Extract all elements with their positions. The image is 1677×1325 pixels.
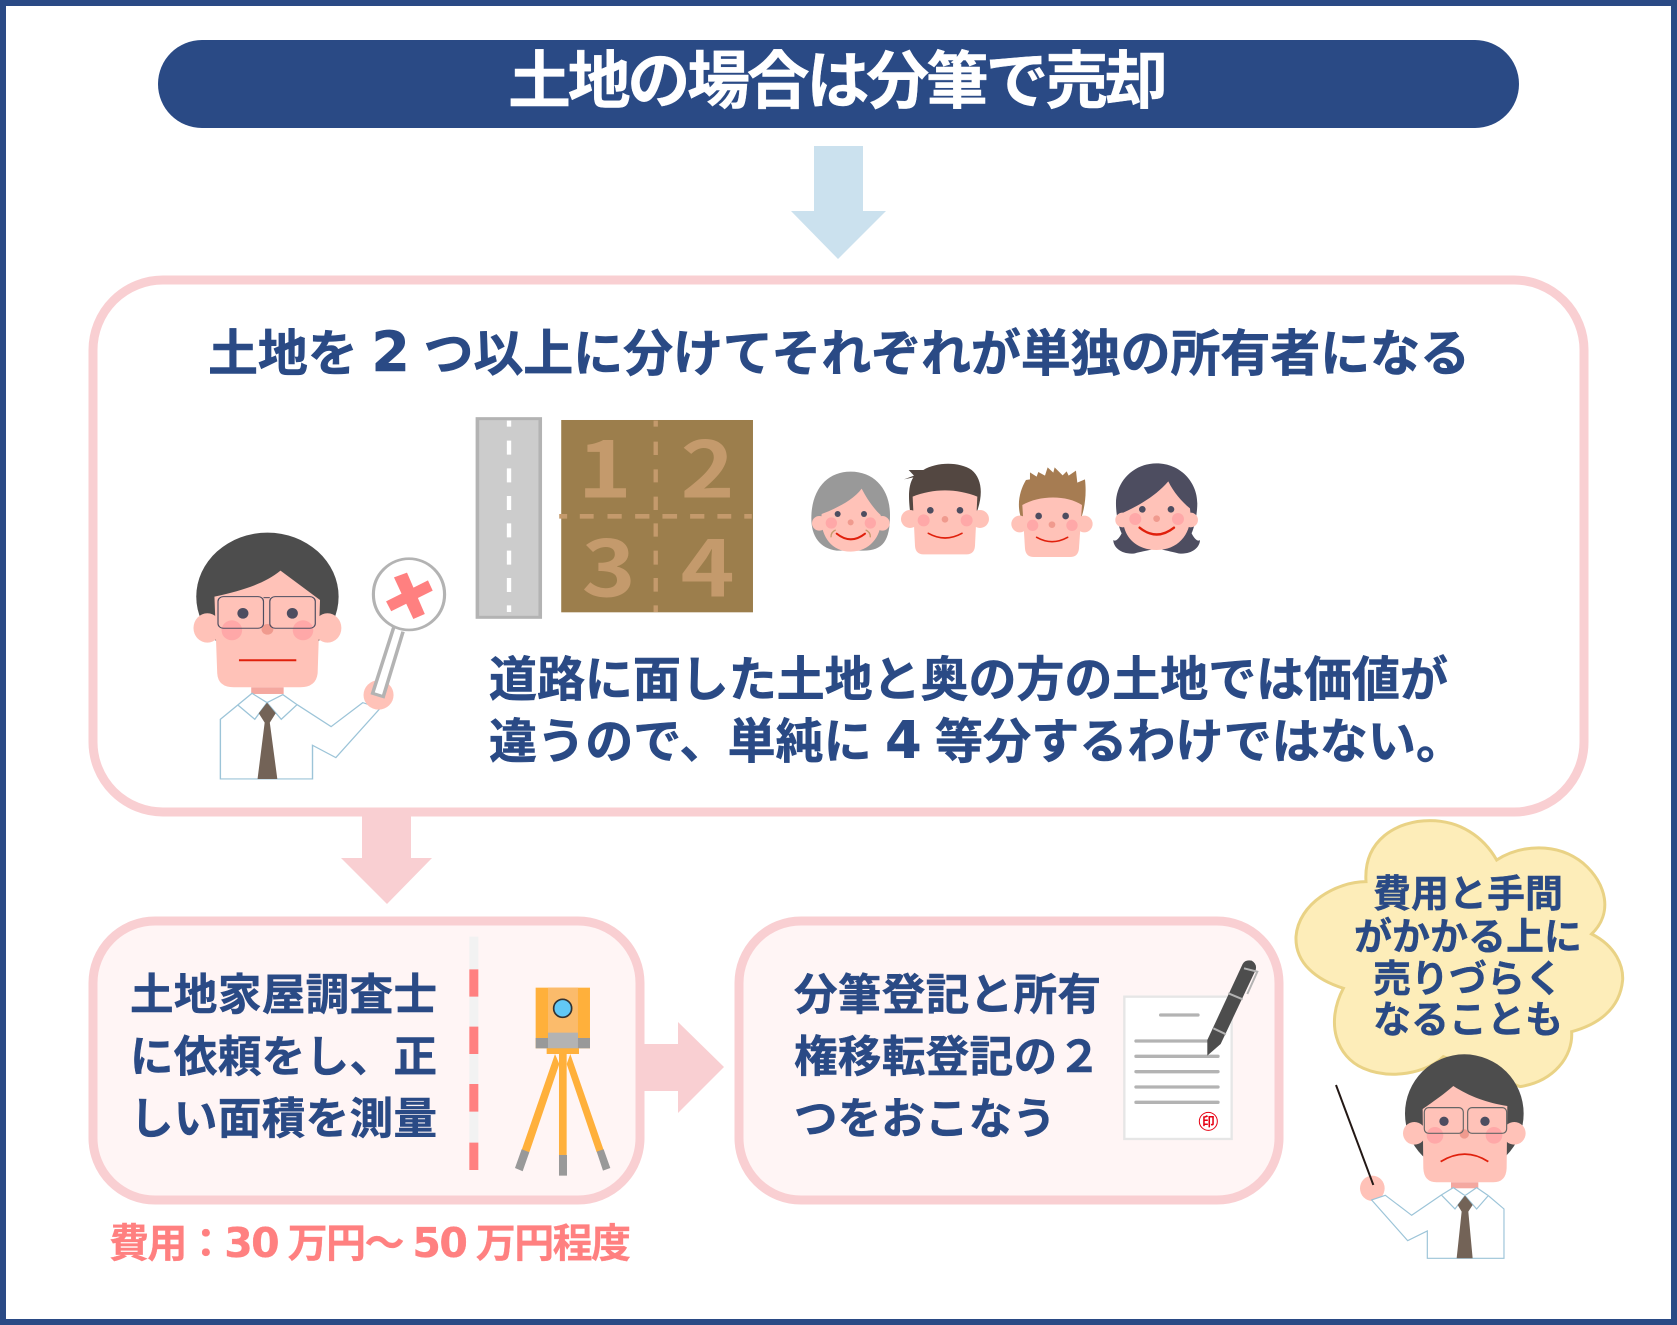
icon: surveying pole and tripod (469, 937, 610, 1176)
registration text: 分筆登記と所有 (794, 972, 1101, 1020)
man with X sign (193, 533, 445, 779)
title (158, 40, 1519, 128)
panel: registration (739, 921, 1279, 1200)
arrow: blue down (791, 146, 886, 259)
explanation text line 1: 道路に面した土地と奥の方の土地では価値が (489, 654, 1448, 707)
face: boy with spiky hair (1011, 467, 1093, 557)
cloud text: なることも (1373, 1000, 1563, 1042)
land divided into four lots: 4 (680, 508, 735, 619)
man with pointer (1336, 1054, 1526, 1258)
land divided into four lots (559, 409, 753, 619)
icon: document and pen: 印 (1202, 1114, 1215, 1129)
face: man with dark hair (901, 464, 989, 554)
registration text: 権移転登記の２ (794, 1034, 1101, 1082)
arrow: pink down (341, 816, 432, 904)
panel: main (93, 280, 1584, 812)
survey text: に依頼をし、正 (130, 1034, 437, 1082)
face: grandmother (811, 472, 890, 552)
cost note: 費用：30 万円〜 50 万円程度 (109, 1219, 631, 1267)
heading: 土地を 2 つ以上に分けてそれぞれが単独の所有者になる (208, 320, 1470, 384)
cloud text: がかかる上に (1354, 917, 1582, 959)
land divided into four lots: 1 (578, 409, 632, 520)
explanation text line 2: 違うので、単純に 4 等分するわけではない。 (489, 711, 1464, 771)
icon: document and pen (1124, 960, 1257, 1139)
face: woman (1113, 463, 1200, 554)
cloud text: 売りづらく (1373, 959, 1563, 1001)
panel: survey (93, 921, 640, 1200)
arrow: pink right (644, 1022, 724, 1113)
registration text: つをおこなう (794, 1096, 1056, 1144)
cloud text: 費用と手間 (1373, 874, 1563, 916)
land divided into four lots: 2 (680, 409, 735, 520)
survey text: 土地家屋調査士 (130, 972, 437, 1020)
survey text: しい面積を測量 (130, 1096, 437, 1144)
title: 土地の場合は分筆で売却 (508, 47, 1168, 117)
land divided into four lots: 3 (582, 508, 636, 619)
family faces (811, 463, 1200, 557)
thought cloud (1296, 821, 1623, 1087)
road (477, 419, 540, 617)
